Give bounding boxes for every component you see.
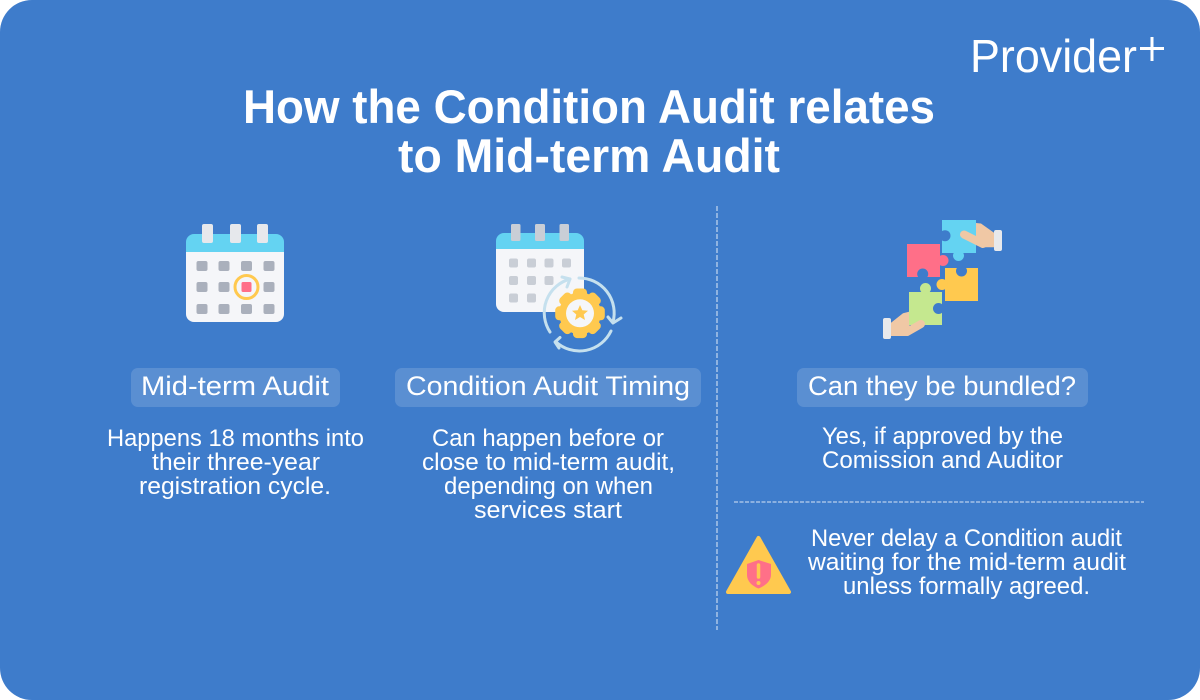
label: Can they be bundled?: Can they be bundled? [808, 371, 1076, 401]
text: bundling answer: Comission and Auditor [822, 447, 1063, 474]
text: Condition Audit Timing description: services start [474, 497, 622, 524]
title [243, 80, 935, 182]
text: bundling answer [822, 423, 1063, 474]
text: Mid-term Audit description: their three-year [152, 449, 320, 476]
text: warning message: unless formally agreed. [843, 573, 1090, 600]
icon: calendar with gear and cycle arrows [496, 224, 621, 351]
text: Condition Audit Timing description [422, 425, 675, 524]
label: Mid-term Audit [131, 368, 340, 407]
text: Mid-term Audit description: registration cycle. [139, 473, 331, 500]
label: Can they be bundled? [797, 368, 1088, 407]
text: Mid-term Audit description: Happens 18 months into [107, 425, 364, 452]
column: Mid-term Audit [107, 224, 364, 500]
label: Condition Audit Timing [395, 368, 701, 407]
text: warning message: Never delay a Condition audit [811, 525, 1122, 552]
text: Condition Audit Timing description: depending on when [444, 473, 653, 500]
text: bundling answer: Yes, if approved by the [822, 423, 1063, 450]
title: to Mid-term Audit [398, 129, 780, 182]
title: How the Condition Audit relates [243, 80, 935, 133]
text: warning message: waiting for the mid-term audit [807, 549, 1126, 576]
icon: calendar with marked date [186, 224, 284, 322]
icon: warning triangle with shield [728, 538, 789, 592]
label: Condition Audit Timing: Condition Audit Timing [406, 371, 690, 401]
text: Mid-term Audit description [107, 425, 364, 500]
callout: warning [728, 525, 1126, 600]
logo: Provider+: Provider [970, 30, 1137, 82]
icon: hands joining puzzle pieces [883, 220, 1002, 339]
text: Condition Audit Timing description: close to mid-term audit, [422, 449, 675, 476]
text: Condition Audit Timing description: Can happen before or [432, 425, 664, 452]
label: Mid-term Audit: Mid-term Audit [141, 371, 330, 401]
column: Condition Audit Timing [395, 224, 701, 524]
column: Can they be bundled? [797, 220, 1088, 474]
text: warning message [807, 525, 1126, 600]
